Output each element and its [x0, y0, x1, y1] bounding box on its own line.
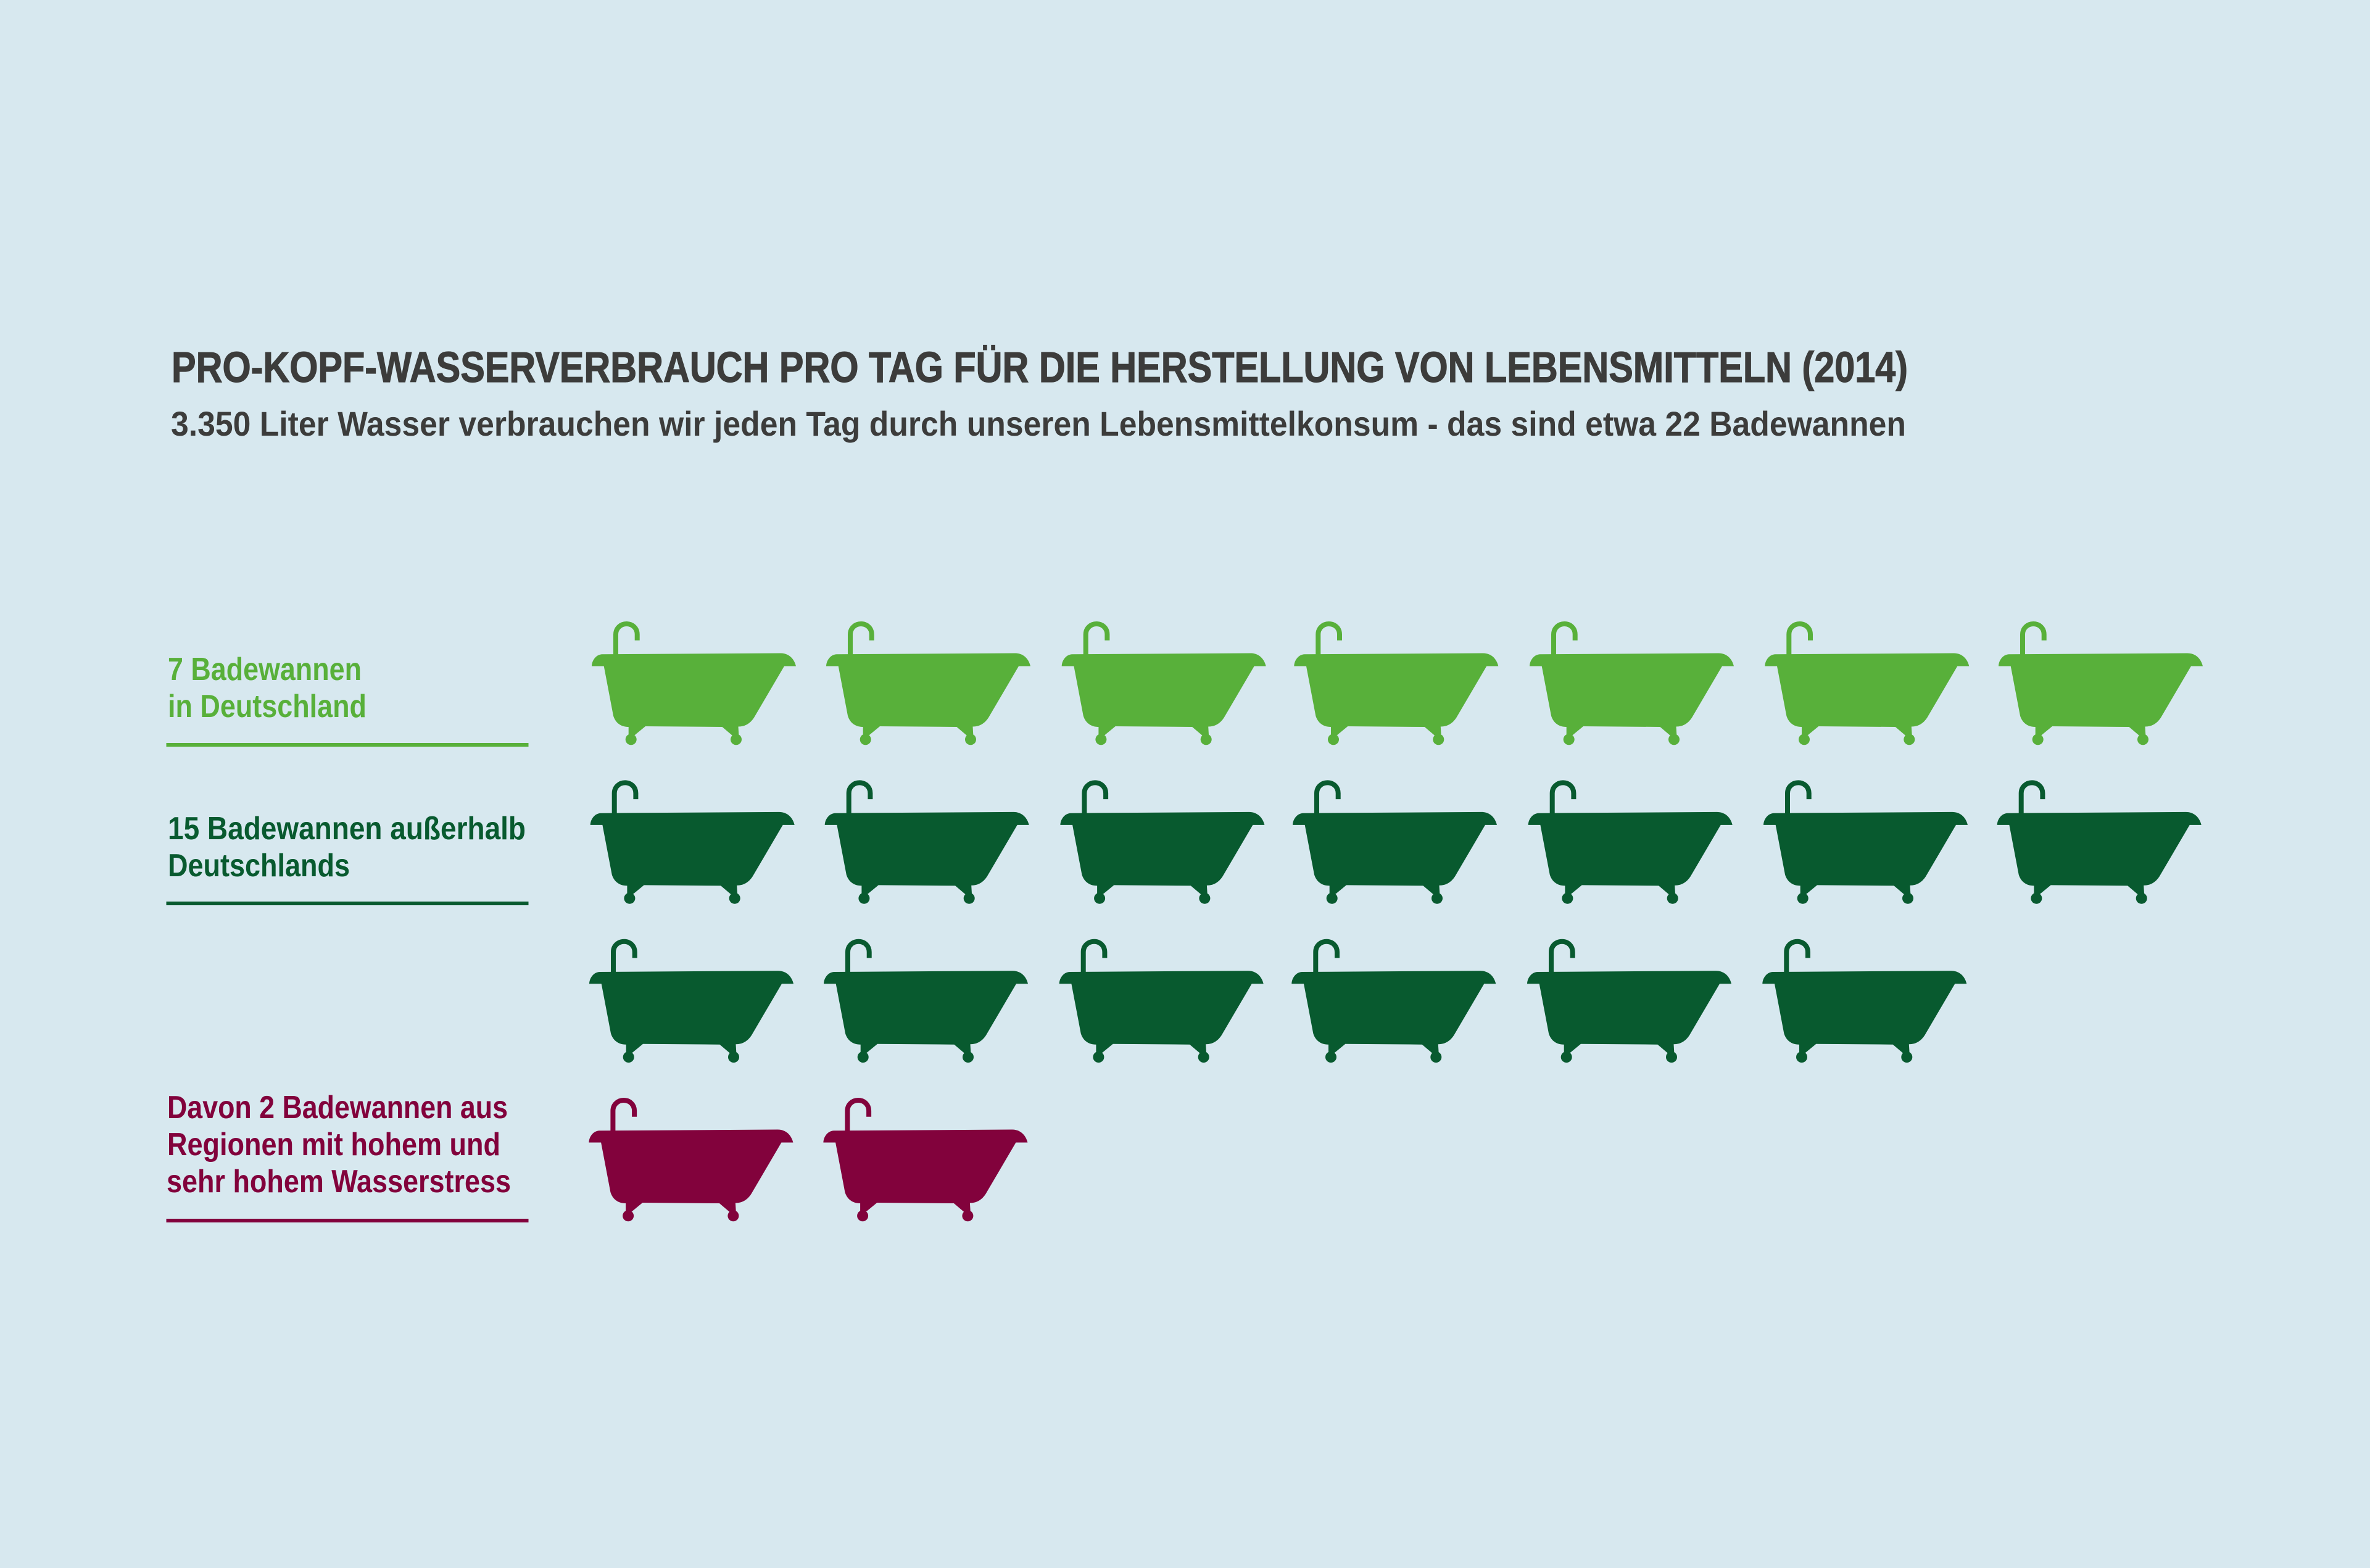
row 1: 7 light green bathtubs [592, 624, 2203, 745]
label: davon 2 Badewannen aus Regionen mit Wasserstress: Regionen mit hohem und [167, 1127, 500, 1163]
label: 15 Badewannen außerhalb Deutschlands: 15 Badewannen außerhalb [168, 811, 526, 847]
label: 7 Badewannen in Deutschland: in Deutschland [168, 689, 367, 724]
label: davon 2 Badewannen aus Regionen mit Wasserstress: sehr hohem Wasserstress [167, 1164, 511, 1200]
title: PRO-KOPF-WASSERVERBRAUCH PRO TAG FÜR DIE HERSTELLUNG VON LEBENSMITTELN (2014) [172, 343, 1908, 391]
label: 7 Badewannen in Deutschland: 7 Badewannen [168, 652, 362, 687]
row 2: 7 dark green bathtubs [590, 782, 2202, 904]
label: davon 2 Badewannen aus Regionen mit Wasserstress: Davon 2 Badewannen aus [167, 1090, 508, 1126]
subtitle: 3.350 Liter Wasser verbrauchen wir jeden Tag durch unseren Lebensmittelkonsum - das sind etwa 22 Badewannen [171, 404, 1906, 443]
row 3: 6 dark green bathtubs [589, 942, 1966, 1063]
label: 15 Badewannen außerhalb Deutschlands: Deutschlands [168, 848, 350, 884]
row 4: 2 maroon bathtubs [589, 1100, 1027, 1221]
label: 7 Badewannen in Deutschland [167, 652, 528, 747]
label: 15 Badewannen außerhalb Deutschlands [167, 811, 528, 905]
label: davon 2 Badewannen aus Regionen mit Wasserstress [167, 1090, 528, 1222]
